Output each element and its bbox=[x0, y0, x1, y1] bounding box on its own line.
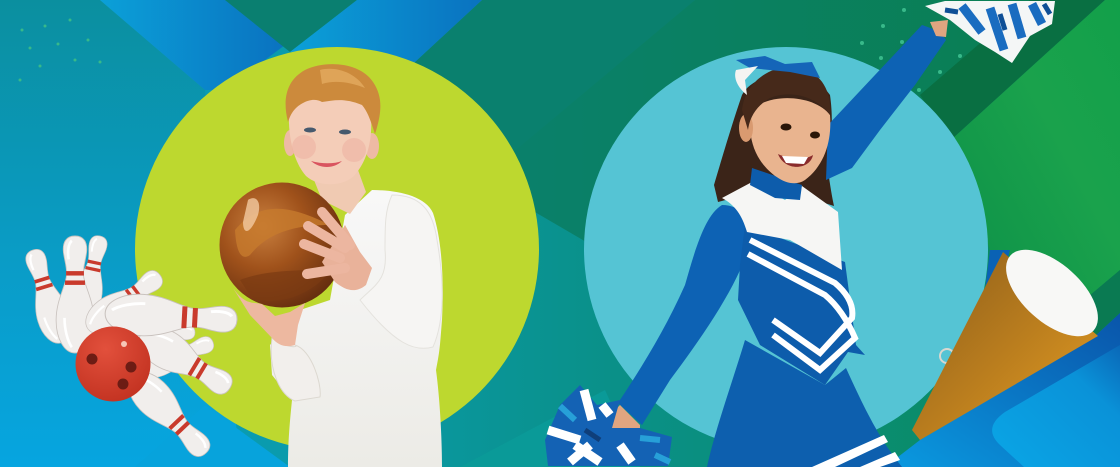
smile bbox=[778, 154, 813, 167]
cheeks bbox=[292, 135, 366, 162]
megaphone bbox=[912, 234, 1113, 440]
bottom pom-pom bbox=[545, 385, 672, 466]
bow white bbox=[735, 66, 758, 95]
lowered arm bbox=[618, 205, 749, 425]
mouth bbox=[311, 161, 342, 167]
skirt bbox=[707, 340, 902, 467]
bow bbox=[736, 56, 820, 78]
turtleneck bbox=[750, 168, 802, 200]
upper hand bbox=[304, 212, 372, 290]
right sleeve bbox=[360, 195, 442, 348]
cone bbox=[912, 252, 1098, 440]
decorative dots bbox=[18, 8, 962, 92]
ear bbox=[739, 114, 753, 142]
raised arm bbox=[826, 25, 946, 180]
skirt stripes bbox=[812, 435, 900, 467]
cyan circle bbox=[584, 47, 988, 451]
hair back bbox=[714, 74, 834, 206]
lime circle bbox=[135, 47, 539, 451]
chevrons bbox=[748, 240, 855, 370]
girl bbox=[605, 20, 948, 467]
hair bbox=[286, 64, 380, 134]
lowered hand bbox=[605, 405, 640, 442]
lower hand bbox=[233, 288, 305, 346]
shirt bbox=[270, 190, 443, 467]
red ball bbox=[76, 326, 150, 402]
vest bbox=[738, 225, 865, 385]
ear left bbox=[284, 130, 296, 156]
bib bbox=[722, 182, 842, 270]
ear right bbox=[365, 133, 379, 159]
eyes bbox=[780, 124, 820, 138]
eyes bbox=[304, 128, 351, 134]
boy bbox=[220, 64, 443, 467]
top blue bands bbox=[100, 0, 482, 90]
top pom-pom bbox=[925, 1, 1055, 63]
face bbox=[289, 88, 371, 184]
bowling pins and ball bbox=[18, 233, 240, 465]
ring bbox=[940, 349, 954, 363]
neck bbox=[310, 170, 366, 214]
face bbox=[750, 98, 830, 183]
bowling ball bbox=[220, 182, 344, 308]
lower sleeve bbox=[271, 338, 320, 401]
raised hand bbox=[930, 20, 948, 37]
opening bbox=[991, 234, 1113, 352]
hair top bbox=[742, 67, 830, 130]
